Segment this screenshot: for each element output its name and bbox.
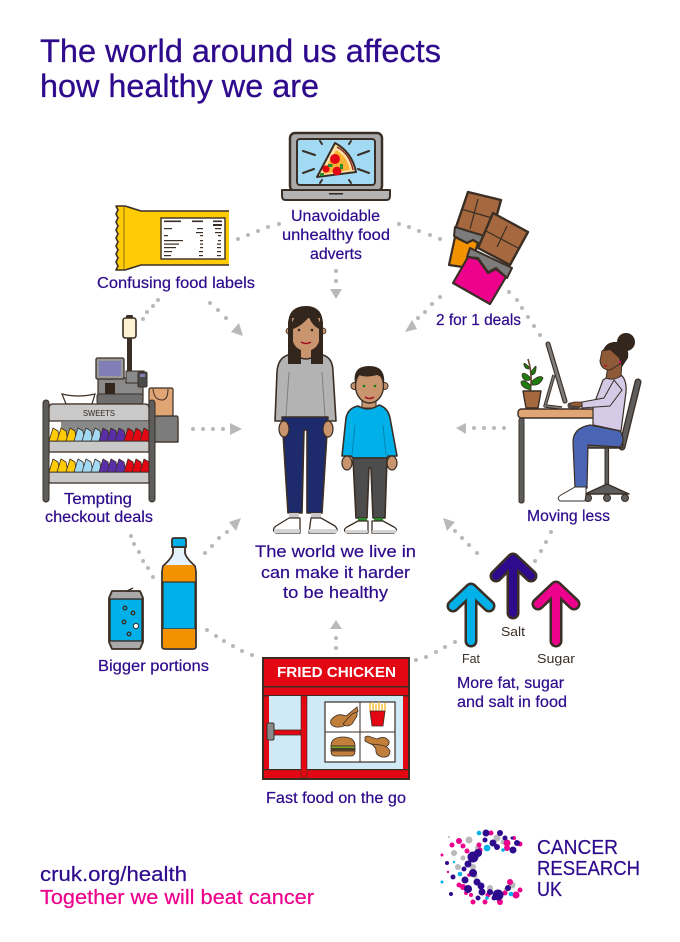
central message: can make it harder bbox=[261, 563, 410, 582]
checkout pole lamp bbox=[123, 315, 136, 372]
label: adverts: Unavoidable bbox=[291, 208, 380, 225]
icon: fat arrow bbox=[453, 589, 489, 641]
arrow: bigger portions to people bbox=[203, 518, 241, 555]
title: how healthy we are bbox=[40, 68, 319, 104]
arrow labels: Salt bbox=[501, 624, 525, 639]
arrow: food labels to people bbox=[208, 301, 243, 336]
menu board bbox=[325, 702, 395, 762]
label: 2 for 1 deals: 2 for 1 deals bbox=[436, 312, 521, 329]
nutrition table bbox=[164, 220, 222, 256]
logo dot mark bbox=[440, 830, 522, 905]
arrow: checkout deals to people bbox=[191, 423, 242, 435]
shop door bbox=[267, 696, 301, 769]
icon: checkout with sweets shelf bbox=[43, 315, 178, 502]
icon: food bar with nutrition label bbox=[116, 206, 229, 270]
arrow: fast food to people bbox=[330, 620, 342, 650]
central message: The world we live in bbox=[255, 542, 416, 561]
label: bigger portions: Bigger portions bbox=[98, 658, 209, 675]
bottle bbox=[162, 538, 196, 649]
arrow: moving less to people bbox=[456, 423, 506, 434]
fizzy can bbox=[109, 588, 143, 649]
label: more fat, sugar and salt bbox=[457, 675, 567, 711]
icon: sugar arrow bbox=[538, 587, 574, 641]
label: moving less: Moving less bbox=[527, 508, 610, 525]
sweets shelf bbox=[43, 400, 155, 502]
label: tempting checkout deals bbox=[45, 491, 153, 526]
icon: laptop with pizza advert bbox=[282, 133, 390, 200]
illustration: boy bbox=[342, 366, 397, 533]
label: adverts: adverts bbox=[310, 246, 362, 263]
dotted connector circle bbox=[129, 222, 553, 662]
label: adverts: unhealthy food bbox=[282, 227, 390, 244]
label: more fat, sugar and salt: More fat, sugar bbox=[457, 675, 564, 692]
shoes bbox=[274, 518, 300, 533]
jeans bbox=[282, 417, 328, 513]
arrow labels: Sugar bbox=[537, 651, 576, 666]
icon: salt arrow bbox=[496, 559, 531, 613]
seated woman bbox=[558, 333, 635, 501]
sweets row two bbox=[49, 459, 149, 472]
logo: Cancer Research UK bbox=[440, 830, 640, 905]
illustration: woman bbox=[274, 306, 337, 533]
burger bbox=[331, 737, 355, 756]
label: tempting checkout deals: checkout deals bbox=[45, 509, 153, 526]
footer link and strapline bbox=[40, 864, 314, 909]
front chocolate bar bbox=[453, 213, 528, 304]
icon: two chocolate bars bbox=[449, 192, 528, 304]
back chocolate bar bbox=[449, 192, 501, 268]
chair bbox=[584, 382, 638, 502]
footer link and strapline: cruk.org/health bbox=[40, 864, 187, 886]
label: tempting checkout deals: Tempting bbox=[64, 491, 132, 508]
logo wordmark bbox=[537, 836, 640, 901]
logo wordmark: CANCER bbox=[537, 836, 618, 859]
shop sign: FRIED CHICKEN bbox=[277, 664, 396, 681]
trousers bbox=[353, 458, 387, 518]
arrow labels bbox=[462, 624, 576, 666]
icon: fried chicken shop bbox=[263, 658, 409, 779]
arrow labels: Fat bbox=[462, 651, 480, 666]
central message bbox=[255, 542, 416, 602]
arrow: adverts to people bbox=[330, 269, 342, 299]
title: The world around us affects bbox=[40, 33, 441, 69]
computer monitor bbox=[545, 344, 580, 408]
shop window bbox=[307, 696, 403, 769]
icon: woman sitting at desk bbox=[518, 333, 638, 503]
till and counter bbox=[60, 358, 178, 442]
icon: can and large bottle bbox=[109, 538, 196, 649]
label: fast food on the go: Fast food on the go bbox=[266, 790, 406, 807]
title bbox=[40, 33, 441, 104]
chicken legs on plate bbox=[365, 736, 390, 757]
chicken legs bbox=[331, 707, 358, 727]
pizza slice bbox=[317, 143, 356, 177]
fries bbox=[370, 702, 385, 726]
label: more fat, sugar and salt: and salt in food bbox=[457, 694, 567, 711]
arrow: 2 for 1 deals to people bbox=[405, 295, 442, 332]
logo wordmark: UK bbox=[537, 878, 562, 901]
central message: to be healthy bbox=[283, 583, 389, 602]
plant bbox=[521, 359, 543, 408]
logo wordmark: RESEARCH bbox=[537, 857, 640, 880]
arrow: fat sugar salt to people bbox=[443, 518, 479, 555]
desk bbox=[518, 409, 595, 503]
sweets row one bbox=[49, 428, 149, 441]
footer link and strapline: Together we will beat cancer bbox=[40, 887, 314, 909]
label: adverts bbox=[282, 208, 390, 263]
label: confusing food labels: Confusing food labels bbox=[97, 275, 255, 292]
sweets shelf: SWEETS bbox=[83, 408, 115, 418]
